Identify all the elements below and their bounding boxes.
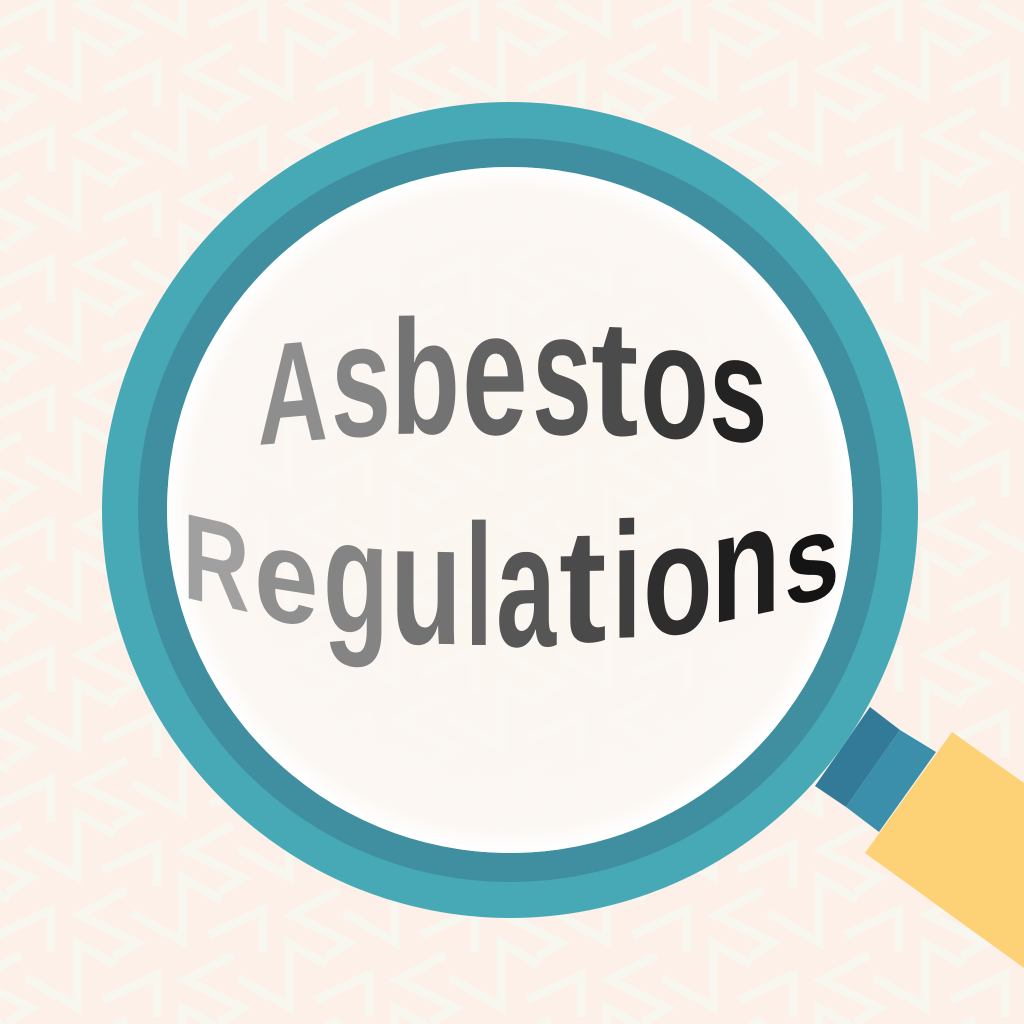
- magnifying glass: [102, 102, 1024, 968]
- word: Asbestos: e: [462, 273, 528, 472]
- inner dark ring: [138, 138, 882, 882]
- word: Asbestos: s: [709, 304, 767, 477]
- word: Regulations: [182, 470, 840, 683]
- word: Asbestos: s: [331, 289, 391, 472]
- word: Asbestos: s: [532, 275, 592, 471]
- word: Regulations: u: [390, 485, 462, 682]
- word: Regulations: s: [784, 484, 840, 633]
- outer teal ring: [102, 102, 918, 918]
- title: Asbestos Regulations: [182, 273, 840, 683]
- word: Regulations: e: [254, 496, 319, 656]
- word: Asbestos: b: [391, 285, 460, 469]
- glass lens: [167, 167, 853, 853]
- word: Regulations: n: [711, 470, 781, 658]
- word: Regulations: t: [559, 496, 607, 677]
- word: Asbestos: [258, 273, 767, 477]
- word: Regulations: g: [323, 484, 389, 671]
- word: Asbestos: A: [258, 310, 328, 477]
- word: Regulations: R: [182, 488, 250, 639]
- yellow handle grip: [865, 732, 1024, 968]
- word: Regulations: o: [643, 489, 713, 670]
- word: Asbestos: t: [591, 284, 639, 471]
- word: Regulations: l: [465, 488, 493, 682]
- word: Regulations: i: [612, 489, 642, 674]
- handle connector: [815, 707, 936, 832]
- word: Asbestos: o: [640, 288, 709, 474]
- word: Regulations: a: [496, 487, 557, 683]
